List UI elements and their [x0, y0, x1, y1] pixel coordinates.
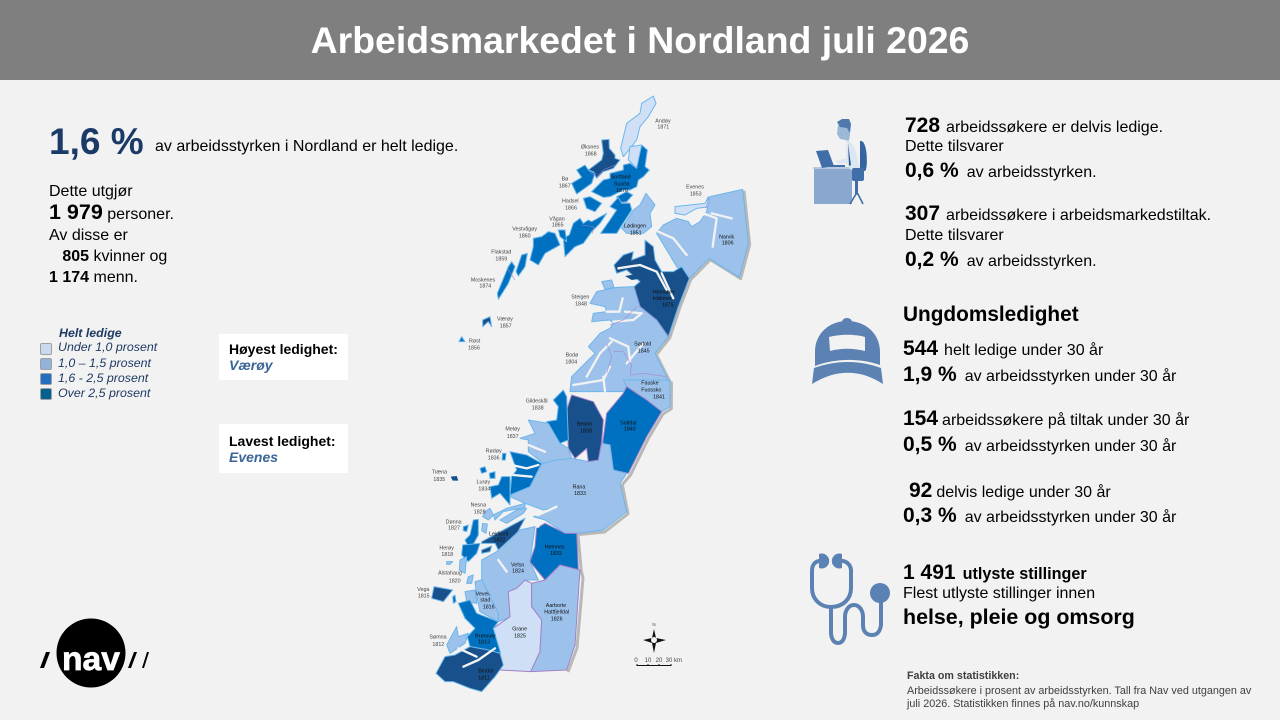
southern map section: 1812: [432, 642, 444, 648]
southern map section: Gildeskål: [526, 397, 548, 404]
persons summary text: Av disse er: [49, 227, 128, 244]
icon: stethoscope: [810, 554, 890, 645]
headline statistic: 1,6 %: [49, 121, 144, 162]
southern map section: [417, 380, 671, 692]
callout: lowest unemployment: [219, 424, 348, 473]
heading: Ungdomsledighet: Ungdomsledighet: [903, 303, 1079, 326]
northern map section: 1870: [616, 188, 628, 194]
southern map section: 1822: [493, 538, 505, 544]
northern map section: [459, 96, 750, 393]
southern map section: Saltdal: [620, 421, 636, 427]
northern map section: Narvik: [719, 235, 735, 241]
northern map section: Vågan: [549, 216, 565, 223]
southern map section: Aarborte: [546, 603, 566, 609]
icon: person at desk: [813, 119, 867, 204]
NAV logo: nav: [62, 640, 121, 677]
southern map section: 1826: [551, 616, 563, 622]
legend: helt ledige: 1,0 – 1,5 prosent: [58, 356, 151, 370]
youth block: tiltak: 154arbeidssøkere på tiltak under 30 år: [903, 407, 1189, 430]
delvis ledige text: 0,6 % av arbeidsstyrken.: [905, 159, 1097, 182]
southern map section: Fuossko: [641, 388, 661, 394]
northern map section: Flakstad: [491, 249, 511, 255]
southern map section: 1813: [478, 640, 490, 646]
compass and scale bar: 0: [634, 658, 638, 664]
persons summary text: 805 kvinner og: [62, 248, 167, 265]
compass and scale bar: km: [674, 658, 682, 664]
headline statistic: av arbeidsstyrken i Nordland er helt ledige.: [155, 138, 458, 155]
southern map section: 1836: [488, 456, 500, 462]
southern map section: Hattfjelldal: [544, 609, 569, 615]
northern map section: Røst: [469, 338, 481, 344]
southern map section: Vevel-: [476, 592, 491, 598]
statistics footnote: Fakta om statistikken:: [907, 670, 1019, 682]
youth block: delvis ledige: [903, 479, 1176, 527]
southern map section: 1825: [514, 634, 526, 640]
compass and scale bar: N: [652, 622, 656, 627]
fjords: [573, 213, 732, 392]
southern map section: 1832: [550, 551, 562, 557]
northern map section: Sortland: [611, 174, 631, 180]
compass and scale bar: 20: [656, 658, 663, 664]
job vacancies text: Flest utlyste stillinger innen: [903, 585, 1095, 602]
southern map section: Sømna: [429, 635, 447, 641]
northern map section: 1857: [500, 324, 512, 330]
job vacancies text: helse, pleie og omsorg: [903, 605, 1135, 629]
title banner: [0, 0, 1280, 80]
compass and scale bar: 30: [666, 658, 673, 664]
statistics footnote: [906, 670, 1252, 710]
northern map section: 1859: [495, 257, 507, 263]
southern map section: 1834: [478, 487, 490, 493]
northern map section: Bø: [562, 176, 569, 182]
southern map section: Grane: [512, 627, 527, 633]
persons summary text: [49, 183, 174, 286]
southern map section: Herøy: [439, 546, 454, 552]
fjords: [458, 445, 557, 667]
northern map section: Evenes: [686, 184, 704, 190]
northern map section: 1851: [630, 230, 642, 236]
southern map section: Lurøy: [477, 480, 490, 486]
youth block: helt ledige: 544 helt ledige under 30 år: [903, 337, 1103, 360]
southern map section: 1818: [441, 552, 453, 558]
southern map section: Nesna: [471, 503, 486, 509]
northern map section: 1848: [575, 301, 587, 307]
northern map section: 1865: [552, 223, 564, 229]
callout: lowest unemployment: Lavest ledighet:: [229, 433, 336, 449]
northern map section: 1845: [638, 349, 650, 355]
northern map section: Moskenes: [471, 277, 495, 283]
southern map section: Rana: [573, 485, 585, 491]
southern map section: 1824: [512, 569, 524, 575]
southern map section: 1841: [653, 395, 665, 401]
delvis ledige text: [905, 114, 1163, 182]
youth block: delvis ledige: 92delvis ledige under 30 år: [909, 479, 1111, 502]
northern map section: 1856: [468, 345, 480, 351]
callout: highest unemployment: Værøy: [229, 357, 273, 373]
southern map section: 1811: [478, 676, 490, 682]
delvis ledige text: Dette tilsvarer: [905, 138, 1004, 155]
arbeidsmarkedstiltak text: 307 arbeidssøkere i arbeidsmarkedstiltak.: [905, 202, 1211, 225]
southern map section: 1820: [449, 579, 461, 585]
northern map section: Lødingen: [624, 224, 646, 230]
southern map section: 1840: [624, 427, 636, 433]
southern map section: 1816: [483, 605, 495, 611]
legend: helt ledige: 1,6 - 2,5 prosent: [58, 371, 148, 385]
delvis ledige text: 728 arbeidssøkere er delvis ledige.: [905, 114, 1163, 137]
southern map section: 1838: [532, 406, 544, 412]
arbeidsmarkedstiltak text: 0,2 % av arbeidsstyrken.: [905, 248, 1097, 271]
legend: helt ledige: Under 1,0 prosent: [58, 340, 157, 354]
southern map section: Rødøy: [486, 448, 502, 454]
southern map section: 1835: [433, 477, 445, 483]
northern map section: Steigen: [571, 295, 589, 301]
southern map section: Vefsn: [511, 562, 524, 568]
youth block: tiltak: [903, 407, 1190, 456]
legend: helt ledige: [40, 326, 158, 400]
northern map section: Vestvågøy: [512, 226, 537, 233]
arbeidsmarkedstiltak text: Dette tilsvarer: [905, 227, 1004, 244]
northern map section: 1875: [662, 303, 674, 309]
northern map section: 1871: [657, 125, 669, 131]
callout: lowest unemployment: Evenes: [229, 449, 278, 465]
northern map section: Øksnes: [581, 145, 599, 151]
southern map section: 1827: [448, 526, 460, 532]
northern map section: 1868: [585, 152, 597, 158]
compass and scale bar: [634, 622, 682, 666]
youth block: helt ledige: [903, 337, 1176, 386]
callout: highest unemployment: [219, 334, 348, 380]
southern map section: Træna: [432, 470, 447, 476]
legend: helt ledige: Over 2,5 prosent: [58, 386, 150, 400]
southern map section: Dønna: [446, 520, 462, 526]
northern map section: 1806: [722, 241, 734, 247]
southern map section: Meløy: [505, 427, 520, 433]
compass and scale bar: 10: [645, 658, 652, 664]
southern map section: Beiarn: [577, 422, 592, 428]
statistics footnote: Arbeidssøkere i prosent av arbeidsstyrken. Tall fra Nav ved utgangen av juli 2026. Statistikken finnes på nav.no/kunnskap: [907, 685, 1251, 710]
northern map section: Hamarøy: [653, 290, 675, 296]
northern map section: Suorta: [614, 182, 630, 188]
northern map section: 1867: [559, 184, 571, 190]
southern map section: 1839: [580, 429, 592, 435]
arbeidsmarkedstiltak text: [905, 202, 1211, 271]
southern map section: stad: [480, 598, 490, 604]
northern map section: 1874: [479, 284, 491, 290]
southern map section: 1833: [574, 491, 586, 497]
northern map section: 1860: [519, 234, 531, 240]
southern map section: Fauske: [641, 381, 659, 387]
youth block: delvis ledige: 0,3 % av arbeidsstyrken under 30 år: [903, 504, 1176, 527]
northern map section: 1804: [565, 360, 577, 366]
northern map section: Andøy: [655, 119, 671, 125]
northern map section: Værøy: [497, 317, 513, 323]
southern map section: Alstahaug: [438, 571, 462, 577]
job vacancies text: 1 491 utlyste stillinger: [903, 561, 1087, 584]
youth block: tiltak: 0,5 % av arbeidsstyrken under 30 år: [903, 433, 1176, 456]
northern map section: Bodø: [566, 352, 579, 358]
headline statistic: [49, 121, 458, 162]
northern map section: Sørfold: [634, 342, 651, 348]
persons summary text: 1 174 menn.: [49, 269, 138, 286]
northern map section: 1853: [690, 192, 702, 198]
southern map section: Bindal: [478, 669, 493, 675]
southern map section: Brønnøy: [475, 634, 496, 640]
NAV logo: [40, 618, 149, 688]
persons summary text: Dette utgjør: [49, 183, 133, 200]
title banner: Arbeidsmarkedet i Nordland juli 2026: [311, 19, 969, 61]
northern map section: Hábmer: [653, 296, 672, 302]
persons summary text: 1 979 personer.: [49, 200, 174, 224]
southern map section: 1828: [474, 509, 486, 515]
southern map section: Vega: [417, 587, 429, 593]
youth block: helt ledige: 1,9 % av arbeidsstyrken under 30 år: [903, 363, 1176, 386]
southern map section: Leirfjord: [489, 531, 508, 537]
legend: helt ledige: Helt ledige: [59, 326, 122, 340]
northern map section: 1866: [565, 205, 577, 211]
northern map section: Hadsel: [562, 199, 579, 205]
southern map section: 1815: [418, 594, 430, 600]
icon: cap: [812, 318, 883, 384]
callout: highest unemployment: Høyest ledighet:: [229, 341, 338, 357]
southern map section: Hemnes: [545, 545, 565, 551]
job vacancies text: [903, 561, 1135, 629]
southern map section: 1837: [507, 434, 519, 440]
